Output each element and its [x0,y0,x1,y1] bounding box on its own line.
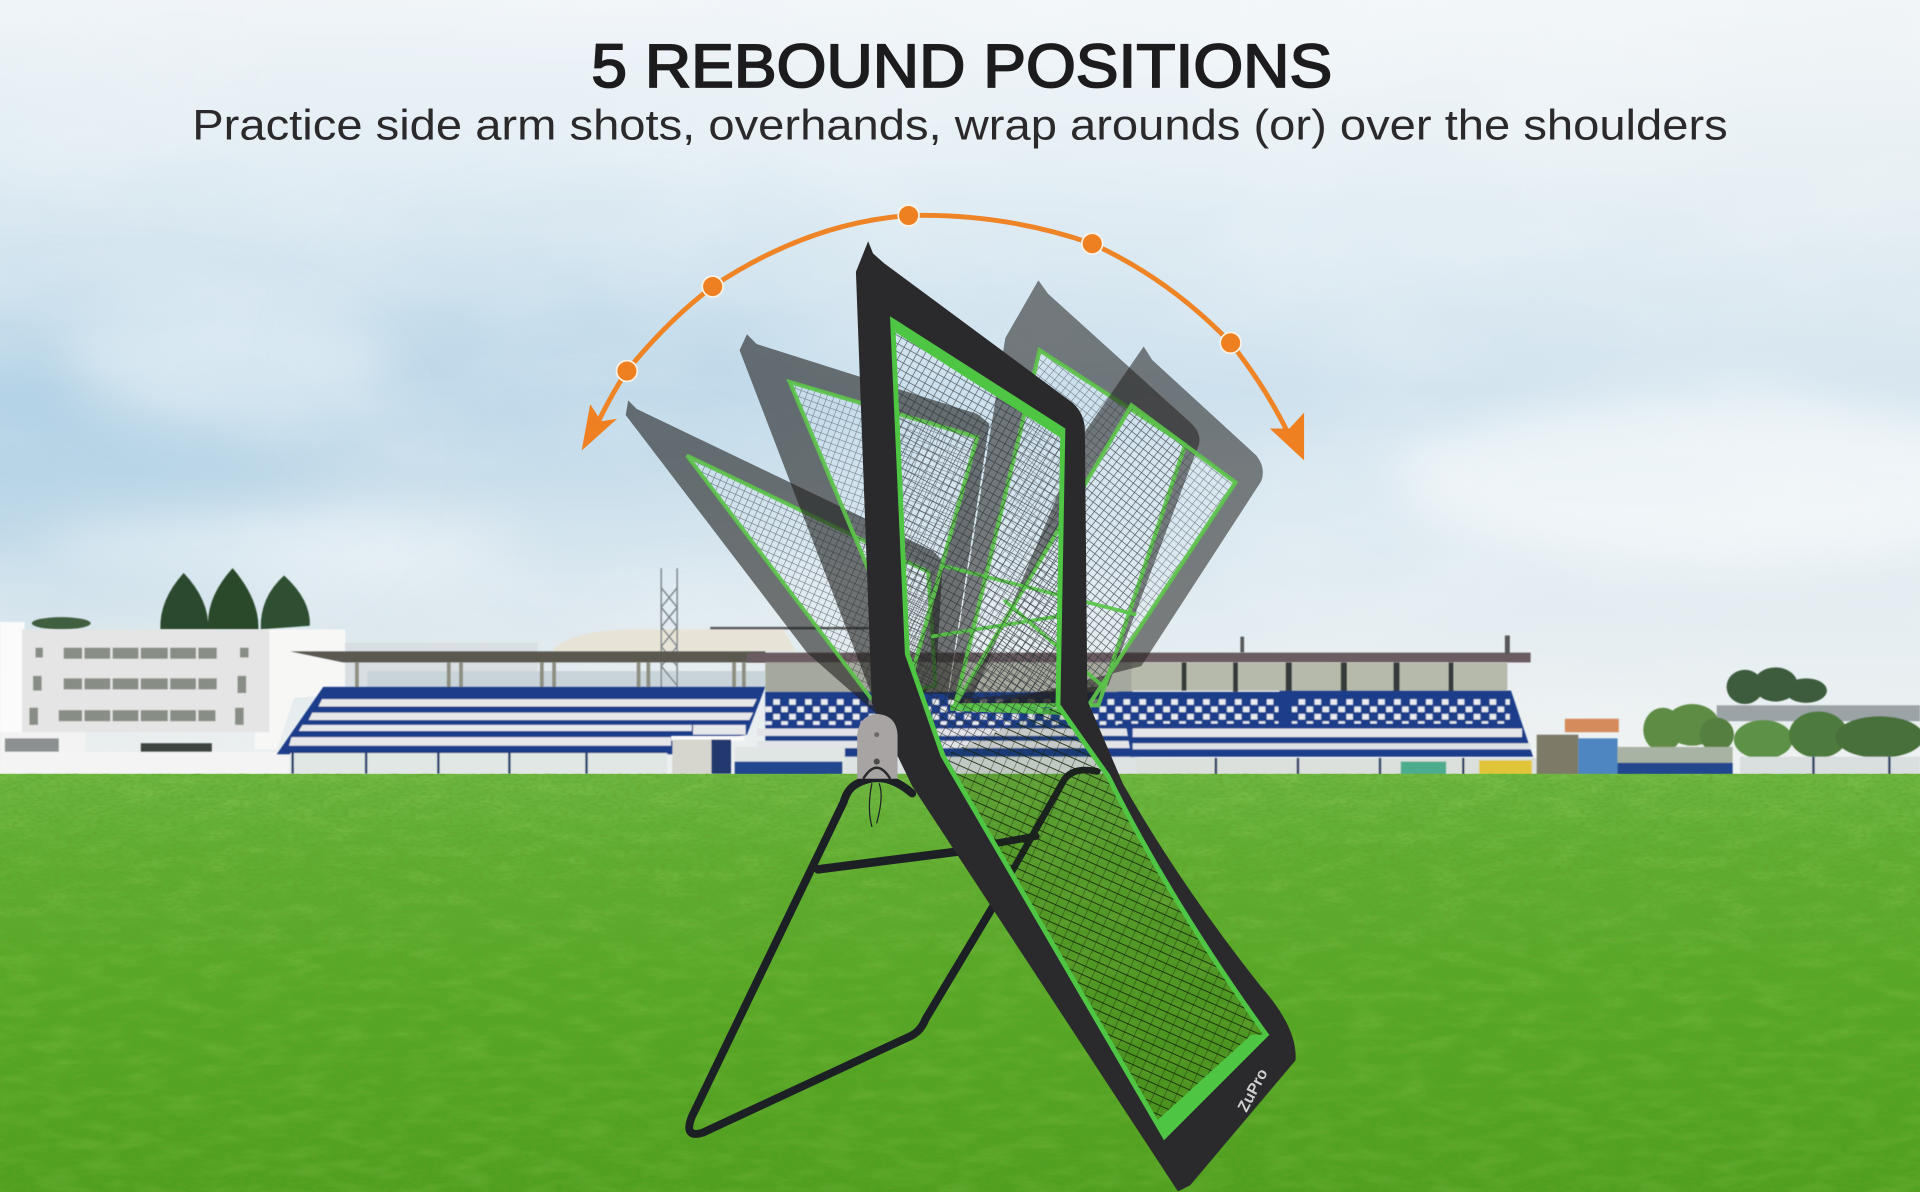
ghost panel: right position [948,280,1199,705]
title: 5 REBOUND POSITIONS [591,32,1332,100]
central and rear stand block [671,653,1531,775]
extra green crossing frame lines [931,566,1136,713]
white building [0,622,345,774]
position dots [617,205,1241,381]
arrowhead right [1270,413,1304,460]
background buildings and lighting tower [345,568,869,688]
advert boards [1401,762,1446,776]
ghost panel: left position [740,334,989,694]
pivot hub [857,714,898,779]
rebounder steel frame [689,770,1097,1134]
panel black border [856,241,1296,1191]
subtitle: Practice side arm shots, overhands, wrap arounds (or) over the shoulders [192,102,1728,150]
upper net [893,321,1063,755]
arrowhead left [582,404,617,451]
main rebounder panel [856,241,1296,1191]
lower net [943,705,1266,1136]
green binding [893,321,1266,1136]
background trees behind building [32,568,310,629]
brand label: ZuPro [1235,1066,1272,1115]
grass field [0,774,1920,1192]
left grandstand [277,651,765,774]
far right trees, sheds and wall [1537,667,1920,775]
right grandstand [1118,635,1540,776]
ghost panel: far right position [955,347,1263,710]
orange arc arrow with position dots [582,205,1304,460]
ghost panel: far left position [626,400,943,716]
sky background [0,0,1920,784]
